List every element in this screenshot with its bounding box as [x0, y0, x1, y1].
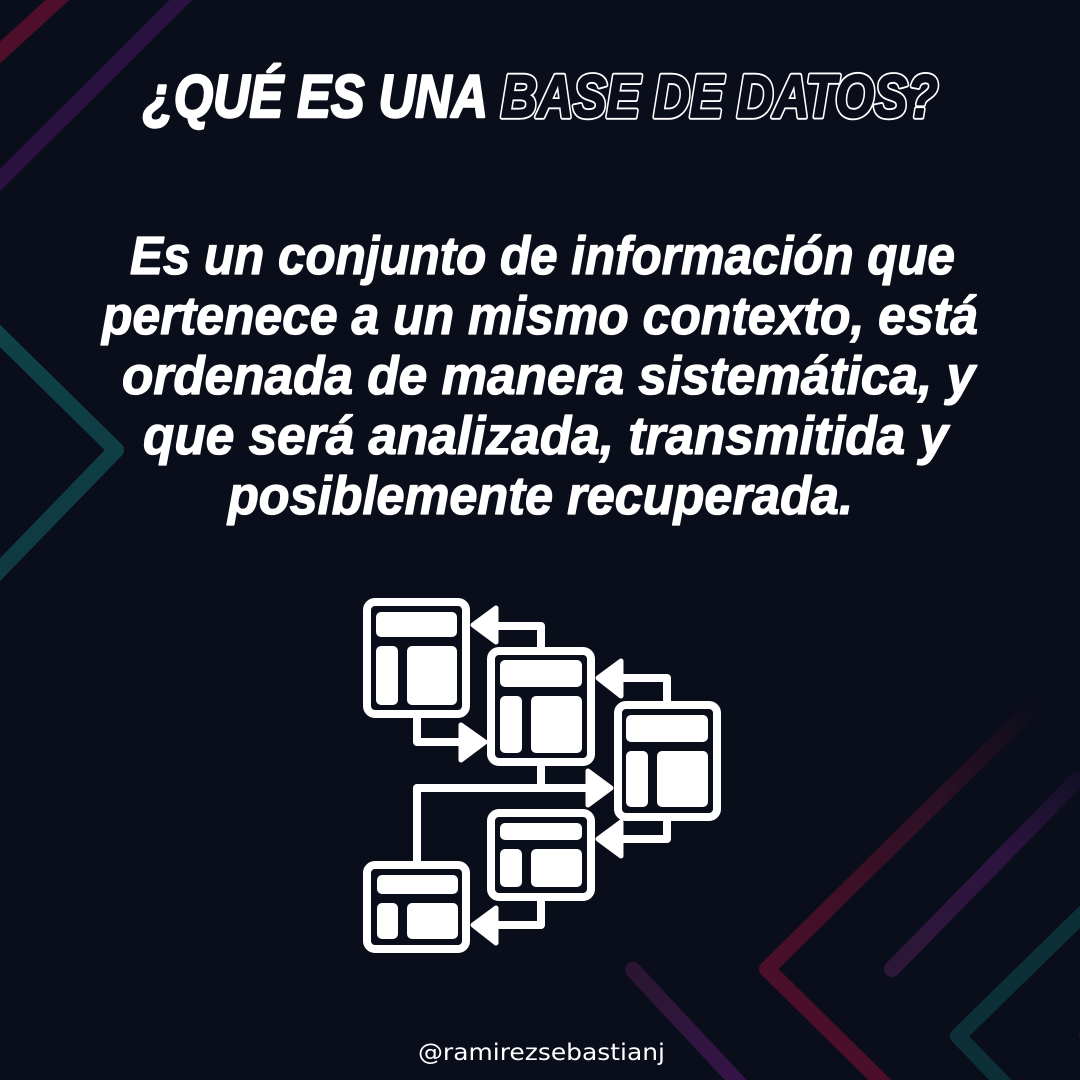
title: outlined part: BASE DE DATOS?	[501, 63, 938, 130]
title: solid part: ¿QUÉ ES UNA	[143, 63, 488, 130]
table 1	[367, 602, 466, 714]
definition text block: posiblemente recuperada.	[226, 466, 853, 526]
table 5	[367, 865, 466, 949]
table 3	[618, 705, 717, 817]
connectors	[417, 626, 667, 925]
footer handle: @ramirezsebastianj	[418, 1040, 665, 1066]
arrowheads	[461, 608, 621, 943]
definition text block: pertenece a un mismo contexto, está	[100, 286, 978, 346]
definition text block	[100, 226, 978, 526]
title: outlined part: BASE DE DATOS?	[501, 63, 938, 130]
icon: linked database tables diagram	[367, 602, 717, 949]
title	[143, 63, 938, 130]
definition text block: Es un conjunto de información que	[130, 226, 955, 286]
table 4	[491, 813, 591, 897]
definition text block: que será analizada, transmitida y	[143, 406, 951, 466]
table 2	[491, 651, 591, 762]
definition text block: ordenada de manera sistemática, y	[122, 346, 978, 406]
